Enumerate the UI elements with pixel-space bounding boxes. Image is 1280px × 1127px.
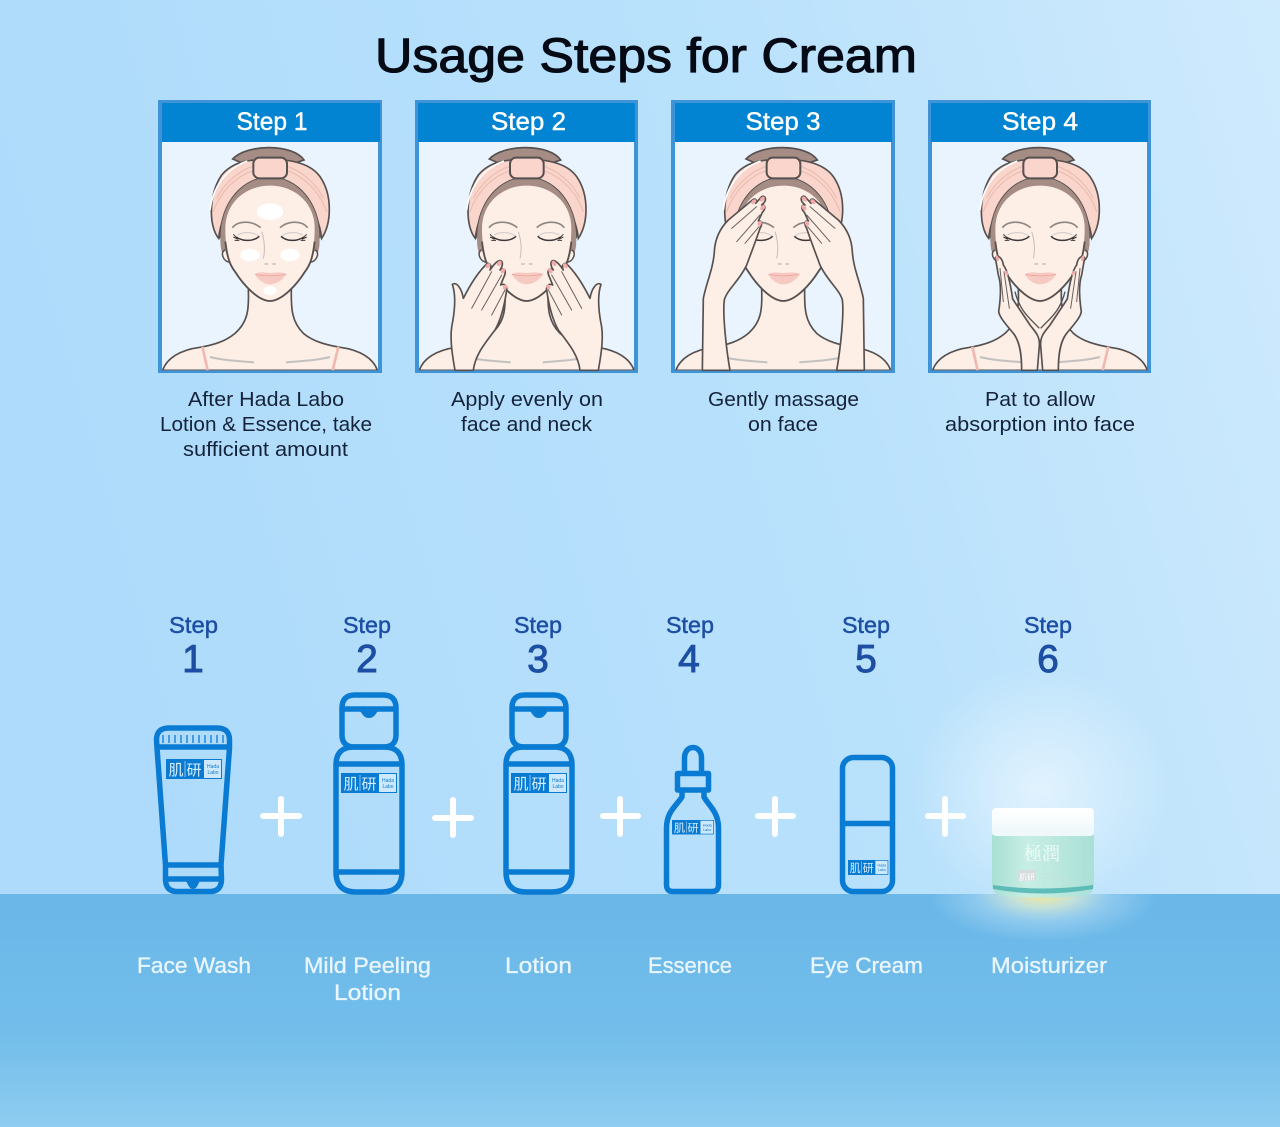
glow behind moisturizer — [910, 665, 1170, 915]
routine step 3 heading — [514, 612, 562, 681]
routine step 4 heading — [666, 612, 714, 681]
step 4 caption: Pat to allow — [985, 388, 1095, 411]
step 4 caption: absorption into face — [945, 413, 1135, 436]
routine step 2 heading: 2 — [356, 638, 378, 681]
routine step 5 heading — [842, 612, 890, 681]
icon: mild peeling lotion bottle — [336, 695, 402, 892]
moisturizer jar: 極潤 — [1024, 840, 1060, 866]
plus — [603, 799, 638, 834]
routine step 4 heading: Step — [666, 612, 714, 638]
step 4 header — [931, 103, 1148, 142]
routine step 1 heading: Step — [169, 612, 218, 638]
step 3 caption: on face — [748, 413, 818, 436]
step 1 caption: After Hada Labo — [188, 388, 344, 411]
label: mild peeling lotion — [304, 953, 431, 1005]
step 1 caption: Lotion & Essence, take — [160, 413, 372, 436]
routine step 2 heading: Step — [343, 612, 391, 638]
step 1 caption — [160, 388, 372, 461]
moisturizer jar: 肌研 — [1019, 873, 1035, 882]
icon: eye cream — [842, 758, 893, 892]
title: Usage Steps for Cream — [375, 30, 917, 83]
plus — [263, 799, 299, 834]
label: mild peeling lotion: Lotion — [334, 980, 401, 1005]
routine step 2 heading — [343, 612, 391, 681]
illustration: applying on face and neck — [419, 148, 634, 370]
label: lotion: Lotion — [505, 953, 572, 978]
panel: step 3 — [673, 102, 893, 371]
illustration: woman with cream dots — [163, 148, 377, 370]
step 1 caption: sufficient amount — [183, 438, 348, 461]
routine step 6 heading: 6 — [1037, 638, 1059, 681]
routine step 5 heading: Step — [842, 612, 890, 638]
label: moisturizer: Moisturizer — [991, 953, 1107, 978]
floor band — [0, 894, 1280, 1127]
step 4 header label: Step 4 — [1002, 108, 1078, 136]
label: mild peeling lotion: Mild Peeling — [304, 953, 431, 978]
step 3 header label: Step 3 — [746, 108, 820, 136]
step 2 caption — [451, 388, 603, 436]
plus — [928, 799, 963, 834]
icon: lotion bottle — [506, 695, 572, 892]
step 2 header — [418, 103, 635, 142]
illustration: patting face — [933, 148, 1147, 370]
plus — [435, 800, 471, 835]
step 3 header — [675, 103, 892, 142]
step 4 caption — [945, 388, 1135, 436]
icon: essence dropper — [666, 748, 718, 892]
step 2 caption: face and neck — [461, 413, 593, 436]
routine step 3 heading: Step — [514, 612, 562, 638]
illustration: massaging forehead — [676, 148, 891, 370]
moisturizer jar — [992, 808, 1094, 898]
step 2 header label: Step 2 — [491, 108, 566, 136]
label: essence: Essence — [648, 953, 732, 978]
routine step 6 heading: Step — [1024, 612, 1072, 638]
plus — [758, 799, 793, 834]
label: face wash: Face Wash — [137, 953, 251, 978]
routine step 3 heading: 3 — [527, 638, 549, 681]
routine step 1 heading: 1 — [182, 638, 204, 681]
icon: face wash tube — [156, 728, 230, 892]
step 2 caption: Apply evenly on — [451, 388, 603, 411]
routine step 6 heading — [1024, 612, 1072, 681]
step 1 header — [162, 103, 380, 142]
panel: step 2 — [417, 102, 636, 371]
glow on floor — [940, 894, 1147, 938]
panel: step 4 — [930, 102, 1149, 371]
step 3 caption: Gently massage — [708, 388, 859, 411]
step 3 caption — [708, 388, 859, 436]
routine step 1 heading — [169, 612, 218, 681]
panel: step 1 — [160, 102, 380, 371]
routine step 5 heading: 5 — [855, 638, 877, 681]
label: eye cream: Eye Cream — [810, 953, 923, 978]
routine step 4 heading: 4 — [678, 638, 700, 681]
step 1 header label: Step 1 — [236, 108, 308, 136]
